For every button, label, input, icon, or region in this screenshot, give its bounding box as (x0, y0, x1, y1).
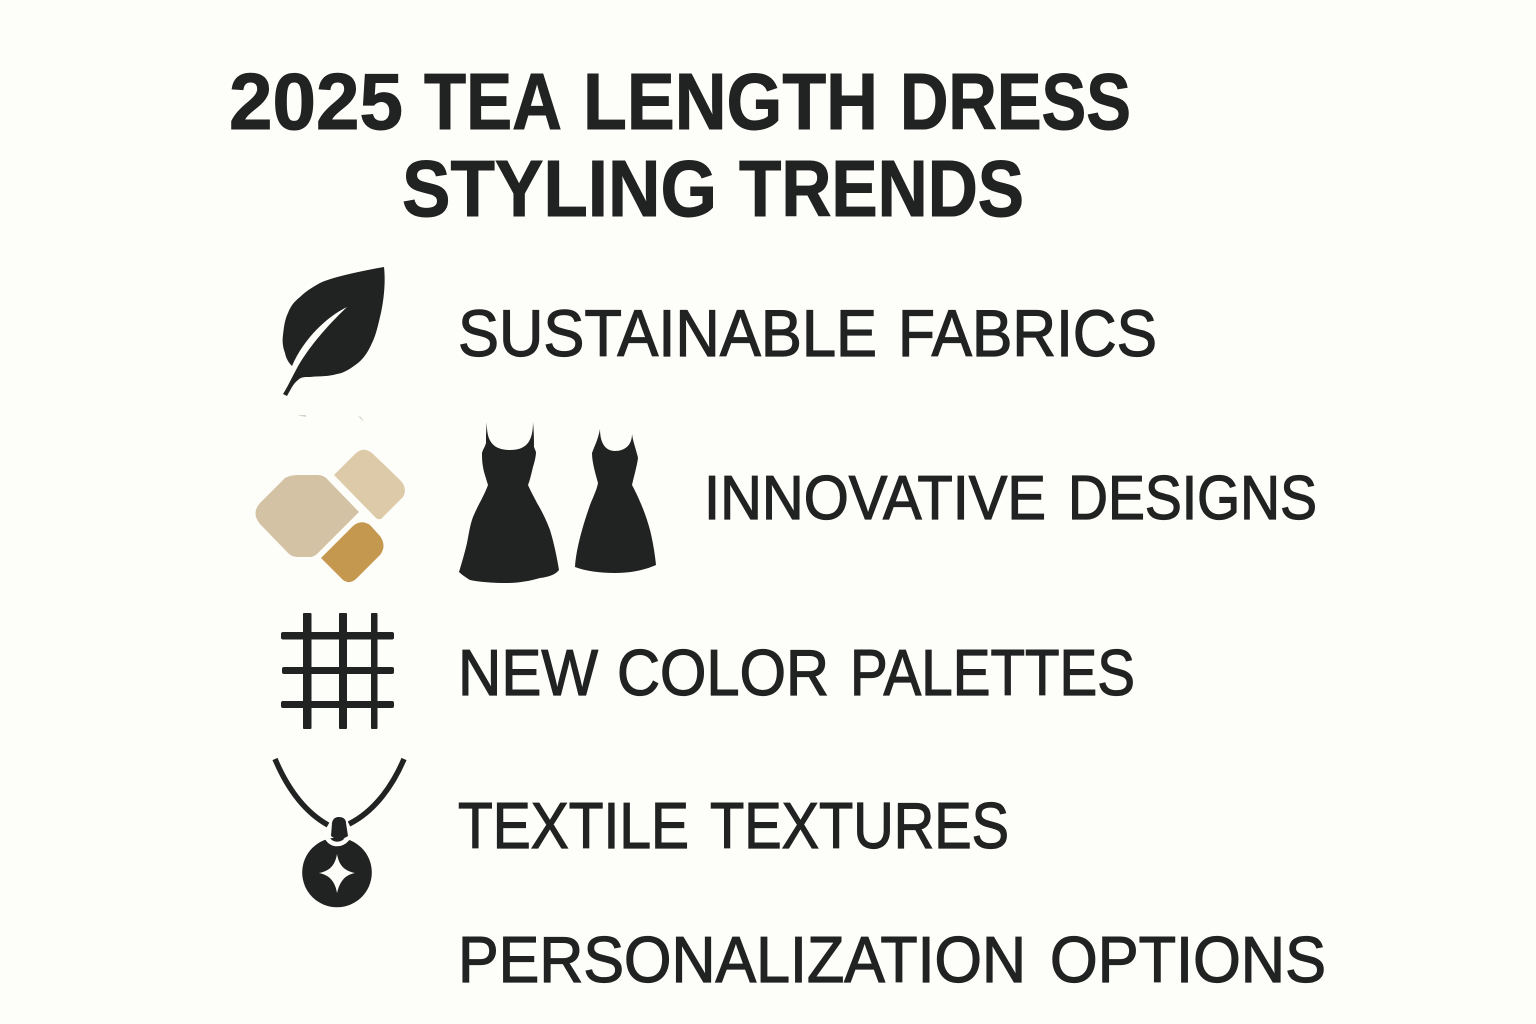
title: STYLING (402, 144, 717, 233)
text: sustainable fabrics: SUSTAINABLE (458, 296, 877, 370)
icon: leaf (283, 267, 385, 396)
text: textile textures (458, 789, 1009, 862)
icon: colour palette swatches (256, 415, 405, 582)
text: personalization options: OPTIONS (1050, 923, 1326, 996)
text: personalization options (458, 923, 1326, 996)
text: sustainable fabrics (458, 296, 1157, 370)
text: innovative designs: DESIGNS (1068, 464, 1317, 533)
text: sustainable fabrics: FABRICS (898, 296, 1157, 370)
title: DRESS (900, 57, 1131, 146)
text: textile textures: TEXTILE (458, 789, 689, 862)
icon: pendant necklace (275, 759, 404, 907)
title: 2025 (229, 57, 403, 146)
icon: textile grid (281, 613, 394, 729)
text: textile textures: TEXTURES (710, 789, 1009, 862)
text: innovative designs (704, 464, 1317, 533)
text: innovative designs: INNOVATIVE (704, 464, 1046, 533)
title (229, 57, 1131, 233)
title: TRENDS (739, 144, 1024, 233)
icon: two dresses (459, 422, 656, 583)
title: TEA (424, 57, 562, 146)
text: new color palettes (458, 636, 1135, 709)
text: new color palettes: PALETTES (850, 636, 1135, 709)
text: personalization options: PERSONALIZATION (458, 923, 1026, 996)
text: new color palettes: NEW (458, 636, 599, 709)
title: LENGTH (583, 57, 878, 146)
text: new color palettes: COLOR (617, 636, 829, 709)
